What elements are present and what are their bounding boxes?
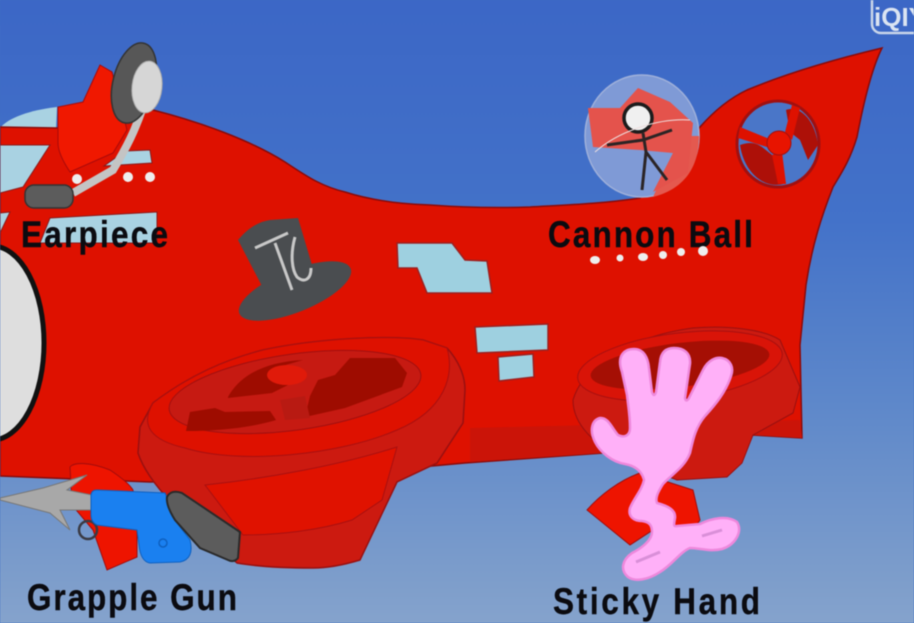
cockpit windows [0,145,157,243]
label: Sticky Hand: Sticky Hand [553,582,760,623]
hull windows [397,243,548,381]
red wing behind sticky hand [587,473,700,545]
icon: tail fan [737,101,819,187]
icon: sticky hand [592,348,739,580]
label: Cannon Ball: Cannon Ball [548,215,753,256]
right engine [573,321,800,480]
label: Earpiece: Earpiece [21,215,168,256]
left round window [0,246,44,440]
hull shading [470,420,802,462]
airship hull [0,48,882,482]
top cockpit window [0,107,57,131]
fan blades [738,105,818,185]
icon: earpiece [25,38,165,208]
icon: grapple gun [0,464,240,570]
portholes [123,172,708,264]
icon: TC top hat [232,218,358,333]
label: Grapple Gun: Grapple Gun [27,578,237,619]
left engine [138,337,465,568]
icon: cannon ball stick figure in bubble [585,75,699,197]
